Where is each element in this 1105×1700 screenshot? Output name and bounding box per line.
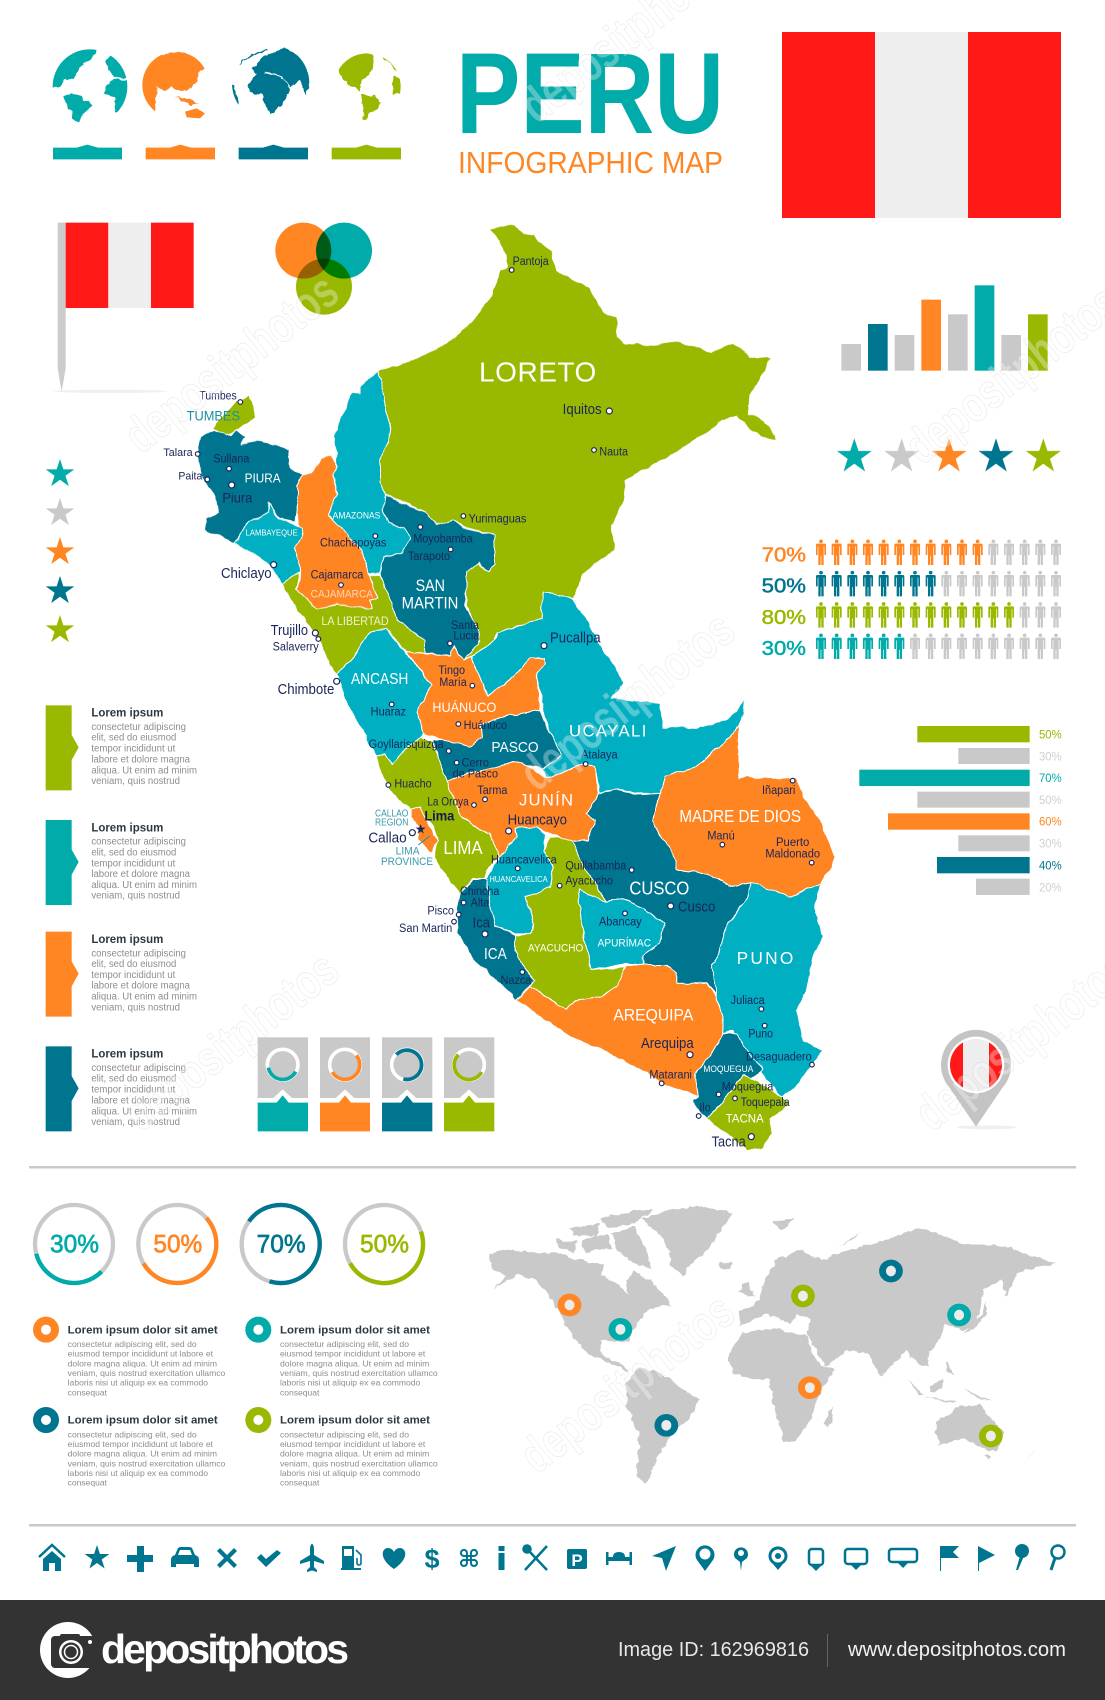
people row: 70% (762, 539, 1061, 567)
map labels and city markers: north: Yurimaguas (469, 512, 526, 526)
footer logo (40, 1622, 349, 1678)
icon: speech marker (845, 1549, 867, 1570)
donut: 30%: 30% (50, 1232, 99, 1259)
map labels and city markers: north: Pantoja (513, 254, 549, 268)
legend item: teal: veniam, quis nostrud (91, 891, 180, 902)
map labels and city markers: north: MARTIN (402, 593, 458, 612)
legend item: green: labore et dolore magna (91, 754, 190, 765)
region: Ancash (337, 628, 432, 765)
legend item: dark blue: labore et dolore magna (91, 1095, 190, 1106)
lower regions (337, 592, 835, 1150)
world map (489, 1206, 1056, 1483)
item: orange: Lorem ipsum dolor sit amet (68, 1324, 218, 1336)
map labels and city markers: north: Moyobamba (413, 531, 473, 545)
map labels and city markers: south: Matarani (649, 1068, 692, 1082)
legend item: dark blue: veniam, quis nostrud (91, 1117, 180, 1128)
donut: 50% (138, 1205, 216, 1283)
watermark: depositphotos (113, 263, 349, 464)
item: orange: laboris nisi ut aliquip ex ea commodo (68, 1378, 208, 1388)
map labels and city markers: south: HUANCAVELICA (489, 874, 548, 884)
percent donuts (35, 1205, 423, 1283)
legend item: green: elit, sed do eiusmod (91, 733, 176, 744)
people row: 80% (762, 602, 1061, 629)
legend item: dark blue: elit, sed do eiusmod (91, 1074, 176, 1085)
map labels and city markers: south: Cusco (678, 900, 715, 916)
legend item: orange: tempor incididunt ut (91, 970, 176, 981)
item: teal: eiusmod tempor incididunt ut labore et (280, 1349, 426, 1359)
map labels and city markers: north: Paita (178, 470, 202, 482)
region: Cajamarca (293, 455, 378, 610)
map labels and city markers: south: JUNÍN (519, 791, 573, 810)
map labels and city markers: north: AMAZONAS (333, 510, 380, 520)
map labels and city markers: south: San Martin (399, 921, 452, 935)
venn circles (275, 223, 372, 315)
image id: Image ID: 162969816 (618, 1639, 809, 1661)
donut: 50%: 50% (153, 1232, 202, 1259)
icon: square marker (809, 1549, 823, 1571)
icon: parking: P (571, 1551, 583, 1570)
map labels and city markers: north: SAN (416, 576, 445, 595)
map labels and city markers: south: Callao (368, 831, 407, 847)
region: Tacna (707, 1075, 790, 1150)
map labels and city markers: south: Huánuco (464, 718, 507, 732)
watermark: depositphotos (113, 941, 349, 1142)
wave bar: orange (146, 145, 215, 159)
item: dark blue: consectetur adipiscing elit, sed do (68, 1429, 197, 1439)
big flag of Peru (782, 32, 1061, 218)
people row: 30% (762, 633, 1061, 660)
legend item: teal: elit, sed do eiusmod (91, 847, 176, 858)
region: San Martin (380, 495, 495, 660)
people row: 50% (762, 571, 1061, 598)
map labels and city markers: south: Ica (473, 915, 491, 931)
map labels and city markers: south: AYACUCHO (528, 943, 583, 955)
map labels and city markers: north: Iquitos (563, 402, 602, 418)
horizontal bar chart (859, 726, 1062, 895)
people row: 30%: 30% (762, 638, 806, 660)
globe: green (338, 53, 401, 120)
legend item: orange: consectetur adipiscing (91, 948, 186, 959)
horizontal bar chart: 70% (1039, 771, 1062, 785)
map labels and city markers: south: Juliaca (731, 993, 765, 1007)
map labels and city markers: north: LORETO (479, 357, 596, 388)
horizontal bar chart: 40% (1039, 858, 1062, 872)
rating stars: top right (837, 438, 1061, 471)
legend item: green (46, 705, 197, 790)
map labels and city markers: south: LIMA (396, 845, 420, 857)
icon: info (498, 1546, 504, 1570)
legend item: teal: consectetur adipiscing (91, 837, 186, 848)
map labels and city markers: north: Trujillo (271, 623, 308, 639)
icon row (39, 1544, 1064, 1574)
icon: parking (567, 1549, 587, 1570)
item: dark blue (37, 1411, 226, 1488)
map labels and city markers: south: Cerro (462, 756, 489, 770)
map labels and city markers: south: Chincha (460, 884, 499, 898)
region: Cusco (572, 790, 750, 997)
icon: car (171, 1547, 199, 1567)
map of Peru regions (197, 223, 835, 1150)
map labels and city markers: south: CALLAO (375, 809, 409, 820)
icon: small pin (734, 1547, 748, 1571)
map labels and city markers: south: Huancavelica (491, 852, 557, 866)
item: orange: eiusmod tempor incididunt ut labore et (68, 1349, 214, 1359)
card: orange (320, 1037, 370, 1131)
region: La Libertad (282, 573, 425, 675)
icon: check (257, 1550, 281, 1567)
map labels and city markers: south: HUÁNUCO (432, 699, 496, 715)
watermark (113, 0, 1105, 1484)
item: green: Lorem ipsum dolor sit amet (280, 1415, 430, 1427)
item: green: dolore magna aliqua. Ut enim ad minim (280, 1449, 429, 1459)
map labels and city markers: south: Alta (471, 896, 489, 910)
region: Ucayali (472, 592, 745, 795)
map labels and city markers: south: UCAYALI (569, 722, 646, 741)
item: orange: veniam, quis nostrud exercitation ullamco (68, 1368, 226, 1378)
item: green: consectetur adipiscing elit, sed do (280, 1429, 409, 1439)
legend item: green: aliqua. Ut enim ad minim (91, 765, 197, 776)
icon: dollar: $ (424, 1544, 440, 1574)
legend blocks (46, 705, 197, 1131)
map labels and city markers: south: PROVINCE (381, 856, 433, 868)
icon: fuel (341, 1546, 361, 1570)
map labels and city markers: north: CAJAMARCA (311, 589, 374, 601)
legend item: green: consectetur adipiscing (91, 722, 186, 733)
horizontal bar chart: 50% (1039, 793, 1062, 807)
item: teal: consequat (280, 1387, 320, 1397)
map labels and city markers: north: Cajamarca (311, 567, 363, 581)
item: green: eiusmod tempor incididunt ut labore et (280, 1439, 426, 1449)
item: dark blue: consequat (68, 1478, 108, 1488)
icon: plus (127, 1546, 153, 1572)
map labels and city markers: south: Moquegua (722, 1080, 773, 1094)
map labels and city markers: north: PIURA (245, 472, 281, 486)
map labels and city markers: south: ICA (484, 946, 507, 963)
item: orange (37, 1321, 226, 1397)
icon: magnifier (1051, 1546, 1064, 1570)
map labels and city markers: south: Desaguadero (746, 1050, 812, 1064)
item: dark blue: veniam, quis nostrud exercitation ullamco (68, 1458, 226, 1468)
legend item: orange: labore et dolore magna (91, 981, 190, 992)
icon: wide speech marker (889, 1549, 917, 1568)
people row: 70%: 70% (762, 545, 806, 567)
map labels and city markers: north: Chimbote (278, 682, 334, 698)
map labels and city markers: north: Nauta (599, 445, 628, 459)
region: Loreto (378, 223, 777, 660)
ring cards (258, 1037, 494, 1131)
footer bar (0, 1600, 1105, 1700)
map labels and city markers: north: Tumbes (199, 388, 237, 402)
icon: heart (383, 1548, 405, 1569)
item: green: laboris nisi ut aliquip ex ea commodo (280, 1468, 421, 1478)
legend item: dark blue: aliqua. Ut enim ad minim (91, 1106, 197, 1117)
map labels and city markers: south: de Pasco (453, 767, 498, 781)
item: teal: laboris nisi ut aliquip ex ea commodo (280, 1378, 421, 1388)
watermark: depositphotos (509, 601, 745, 802)
icon: cross (217, 1548, 237, 1568)
map labels and city markers: north: Santa (451, 618, 479, 632)
footer logo: depositphotos (101, 1626, 349, 1672)
map labels and city markers: north: Sullana (213, 451, 249, 465)
map labels and city markers: north: Lucia (453, 628, 479, 642)
map labels and city markers: north (163, 254, 628, 698)
icon: bed (606, 1552, 632, 1565)
wave bar: teal (53, 145, 122, 159)
map labels and city markers: south: Goyllarisquizga (369, 737, 444, 751)
map labels and city markers: south: Lima (424, 808, 455, 824)
card: dark blue (382, 1037, 432, 1131)
flag pin (53, 223, 194, 393)
legend item: teal: Lorem ipsum (91, 820, 163, 834)
bar chart: top right (841, 285, 1048, 371)
globe: dark blue (230, 48, 312, 116)
item: teal: veniam, quis nostrud exercitation ullamco (280, 1368, 438, 1378)
item: orange: dolore magna aliqua. Ut enim ad minim (68, 1358, 217, 1368)
wave bar: green (332, 145, 401, 159)
donut: 70%: 70% (257, 1232, 306, 1259)
map labels and city markers: south: ANCASH (351, 671, 408, 688)
map labels and city markers: south: Atalaya (581, 747, 618, 761)
item: teal: Lorem ipsum dolor sit amet (280, 1324, 430, 1336)
icon: plane (300, 1544, 324, 1572)
people row: 80%: 80% (762, 607, 806, 629)
map labels and city markers: south: PASCO (491, 740, 539, 756)
item: teal: dolore magna aliqua. Ut enim ad minim (280, 1358, 429, 1368)
map labels and city markers: south: MOQUEGUA (703, 1064, 753, 1074)
horizontal bar chart: 30% (1039, 837, 1062, 851)
legend item: orange: aliqua. Ut enim ad minim (91, 992, 197, 1003)
legend item: teal: aliqua. Ut enim ad minim (91, 880, 197, 891)
region: Junin (447, 762, 598, 857)
legend item: dark blue: tempor incididunt ut (91, 1085, 176, 1096)
legend item: green: veniam, quis nostrud (91, 776, 180, 787)
map labels and city markers: north: LA LIBERTAD (321, 614, 389, 628)
map labels and city markers: north: Chiclayo (221, 566, 272, 582)
legend item: orange: Lorem ipsum (91, 932, 163, 946)
icon: navigation arrow (652, 1546, 676, 1571)
item: orange: consectetur adipiscing elit, sed do (68, 1339, 197, 1349)
website: www.depositphotos.com (847, 1639, 1066, 1661)
icon: pin (696, 1545, 714, 1571)
region: Piura (197, 428, 302, 543)
map labels and city markers: south: Tarma (477, 783, 507, 797)
legend item: teal: labore et dolore magna (91, 869, 190, 880)
map labels and city markers: north: Tarapoto (408, 549, 450, 563)
map labels and city markers: south: Abancay (599, 915, 642, 929)
item: dark blue: dolore magna aliqua. Ut enim ad minim (68, 1449, 217, 1459)
map labels and city markers: south: Puerto (776, 835, 809, 849)
icon: pushpin (1015, 1544, 1029, 1570)
item: dark blue: eiusmod tempor incididunt ut labore et (68, 1439, 214, 1449)
region: Madre de Dios (652, 727, 835, 897)
legend item: dark blue (46, 1046, 197, 1131)
map labels and city markers: south: Quillabamba (565, 858, 626, 872)
map labels and city markers: south: TACNA (726, 1112, 764, 1126)
legend item: teal: tempor incididunt ut (91, 858, 176, 869)
map labels and city markers: south: Ayacucho (565, 873, 613, 887)
map labels and city markers: south: Manú (707, 828, 735, 842)
item: green: consequat (280, 1478, 320, 1488)
text items (37, 1321, 438, 1488)
map labels and city markers: north: Pucallpa (550, 631, 601, 647)
legend item: teal (46, 820, 197, 905)
map labels and city markers: north: Chachapoyas (320, 536, 386, 550)
legend item: dark blue: Lorem ipsum (91, 1047, 163, 1061)
map labels and city markers: south: La Oroya (427, 795, 469, 809)
item: orange: consequat (68, 1387, 108, 1397)
map labels and city markers: south: MADRE DE DIOS (679, 806, 801, 826)
map labels and city markers: north: Piura (222, 489, 253, 505)
map pin with flag (941, 1030, 1017, 1129)
map labels and city markers: south: Pisco (427, 903, 454, 917)
map labels and city markers: north: TUMBES (187, 408, 240, 424)
item: dark blue: laboris nisi ut aliquip ex ea commodo (68, 1468, 208, 1478)
wave bar: dark blue (239, 145, 308, 159)
donut: 70% (242, 1205, 320, 1283)
map labels and city markers: south: APURÍMAC (598, 937, 651, 950)
map labels and city markers: south: Huancayo (508, 813, 567, 829)
region: Tumbes (212, 395, 255, 435)
region: Amazonas (328, 371, 411, 573)
map labels and city markers: south: PUNO (737, 948, 793, 968)
item: teal: consectetur adipiscing elit, sed do (280, 1339, 409, 1349)
map labels and city markers: north: LAMBAYEQUE (246, 528, 298, 538)
region: Lima (375, 738, 500, 893)
map labels and city markers: south: CUSCO (629, 877, 689, 898)
map labels and city markers: south: Ilo (699, 1101, 711, 1115)
region: Ayacucho (515, 837, 627, 1010)
icon: command: ⌘ (458, 1545, 480, 1573)
people chart (762, 539, 1061, 660)
icon: flag (940, 1546, 959, 1571)
donut: 30% (35, 1205, 113, 1283)
globes row (47, 43, 403, 159)
icon: fork and knife (524, 1546, 547, 1570)
horizontal bar chart: 30% (1039, 749, 1062, 763)
map labels and city markers: south: Arequipa (641, 1036, 694, 1052)
region: Pasco (433, 710, 562, 782)
title: INFOGRAPHIC MAP (458, 145, 723, 180)
icon: home (39, 1545, 65, 1571)
title: PERU (456, 30, 724, 158)
map labels and city markers: south: AREQUIPA (613, 1006, 694, 1025)
region: Puno (712, 882, 823, 1097)
horizontal bar chart: 20% (1039, 880, 1062, 894)
horizontal bar chart: 50% (1039, 727, 1062, 741)
map labels and city markers: south: Toquepala (741, 1095, 790, 1109)
map labels and city markers: north: Salaverry (273, 640, 319, 654)
map labels and city markers: south: Nazca (501, 973, 531, 987)
map labels and city markers: south: Huacho (394, 776, 432, 790)
item: green: veniam, quis nostrud exercitation ullamco (280, 1458, 438, 1468)
horizontal bar chart: 60% (1039, 815, 1062, 829)
region: Moquegua (692, 1033, 763, 1120)
map labels and city markers: south: REGION (375, 817, 408, 828)
region: Ica (457, 880, 535, 1000)
legend item: orange: elit, sed do eiusmod (91, 959, 176, 970)
legend item: green: tempor incididunt ut (91, 744, 176, 755)
region: Arequipa (517, 965, 723, 1097)
icon: star (85, 1545, 109, 1569)
card: teal (258, 1037, 308, 1131)
donut: 50% green (345, 1205, 423, 1283)
map labels and city markers: south: Tingo (438, 663, 465, 677)
legend item: orange (46, 932, 197, 1017)
icon: target pin (768, 1546, 788, 1570)
card: green (444, 1037, 494, 1131)
map labels and city markers: south: Tacna (712, 1135, 746, 1151)
people row: 50%: 50% (762, 576, 806, 598)
legend item: dark blue: consectetur adipiscing (91, 1063, 186, 1074)
region: Callao and Lima province (412, 807, 438, 853)
region: Apurimac (578, 890, 665, 970)
left column stars (46, 459, 74, 642)
map labels and city markers: south: María (439, 675, 467, 689)
icon: pennant (978, 1546, 995, 1571)
item: green (249, 1411, 438, 1488)
item: dark blue: Lorem ipsum dolor sit amet (68, 1415, 218, 1427)
donut: 50% green: 50% (360, 1232, 409, 1259)
region: Huanuco (407, 647, 545, 747)
map labels and city markers: south: Iñapari (762, 783, 795, 797)
map labels and city markers: north: Talara (163, 447, 193, 459)
map labels and city markers: south: LIMA (443, 837, 483, 858)
map labels and city markers: south (351, 663, 820, 1151)
region: Huancavelica (485, 827, 553, 933)
map labels and city markers: south: Puno (748, 1026, 773, 1040)
map labels and city markers: south: Huaraz (371, 705, 406, 719)
globe: orange (142, 52, 205, 118)
legend item: orange: veniam, quis nostrud (91, 1002, 180, 1013)
region: Lambayeque (235, 503, 303, 583)
legend item: green: Lorem ipsum (91, 706, 163, 720)
globe: teal (52, 49, 128, 122)
item: teal (249, 1321, 438, 1397)
watermark: depositphotos (509, 1283, 745, 1484)
map labels and city markers: south: Maldonado (765, 847, 820, 861)
